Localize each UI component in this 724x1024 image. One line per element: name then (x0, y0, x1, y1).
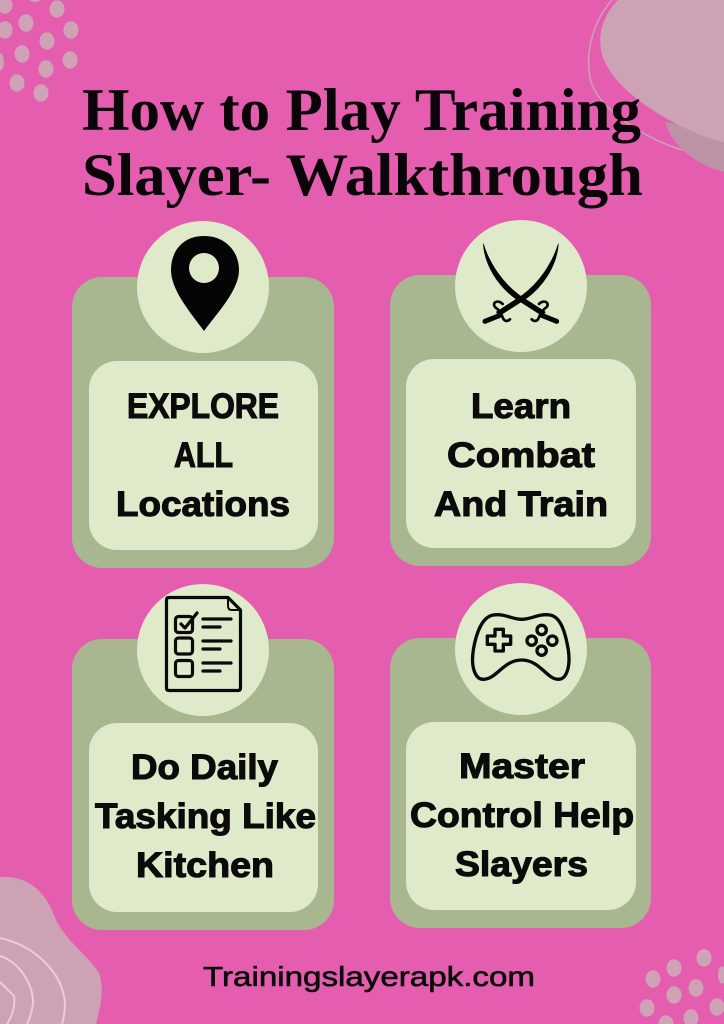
decoration: top-right blobs (589, 0, 724, 172)
icon: checklist document (166, 598, 240, 690)
decoration: bottom-left blob (0, 877, 102, 1024)
footer website: Trainingslayerapk.com (203, 961, 535, 992)
text: master control help slayers (410, 747, 634, 884)
text: explore all locations: ALL (174, 436, 233, 475)
title: How to Play Training (82, 77, 641, 143)
icon: map pin (171, 236, 239, 331)
text: do daily tasking like kitchen: Kitchen (136, 846, 274, 885)
text: learn combat and train (434, 387, 608, 524)
text: learn combat and train: Learn (471, 387, 571, 426)
text: do daily tasking like kitchen: Do Daily (131, 748, 279, 787)
panel: explore all locations (72, 221, 334, 568)
text: learn combat and train: Combat (447, 436, 595, 475)
text: do daily tasking like kitchen: Tasking Like (95, 797, 316, 836)
title (82, 77, 643, 208)
title: Slayer- Walkthrough (82, 142, 643, 208)
panel: learn combat and train (390, 220, 651, 566)
text: explore all locations: Locations (116, 485, 290, 524)
decoration: bottom-right dots (640, 949, 724, 1024)
panel: master control (390, 583, 651, 928)
icon: crossed swords (483, 244, 558, 321)
text: explore all locations (116, 387, 290, 524)
text: explore all locations: EXPLORE (127, 387, 279, 426)
text: do daily tasking like kitchen (95, 748, 316, 885)
icon: game controller (473, 615, 569, 679)
text: master control help slayers: Control Help (410, 796, 634, 835)
panel: do daily tasking (72, 584, 334, 930)
text: master control help slayers: Master (459, 747, 585, 786)
decoration: top-left dots (0, 0, 78, 102)
text: learn combat and train: And Train (434, 485, 608, 524)
text: master control help slayers: Slayers (455, 845, 588, 884)
